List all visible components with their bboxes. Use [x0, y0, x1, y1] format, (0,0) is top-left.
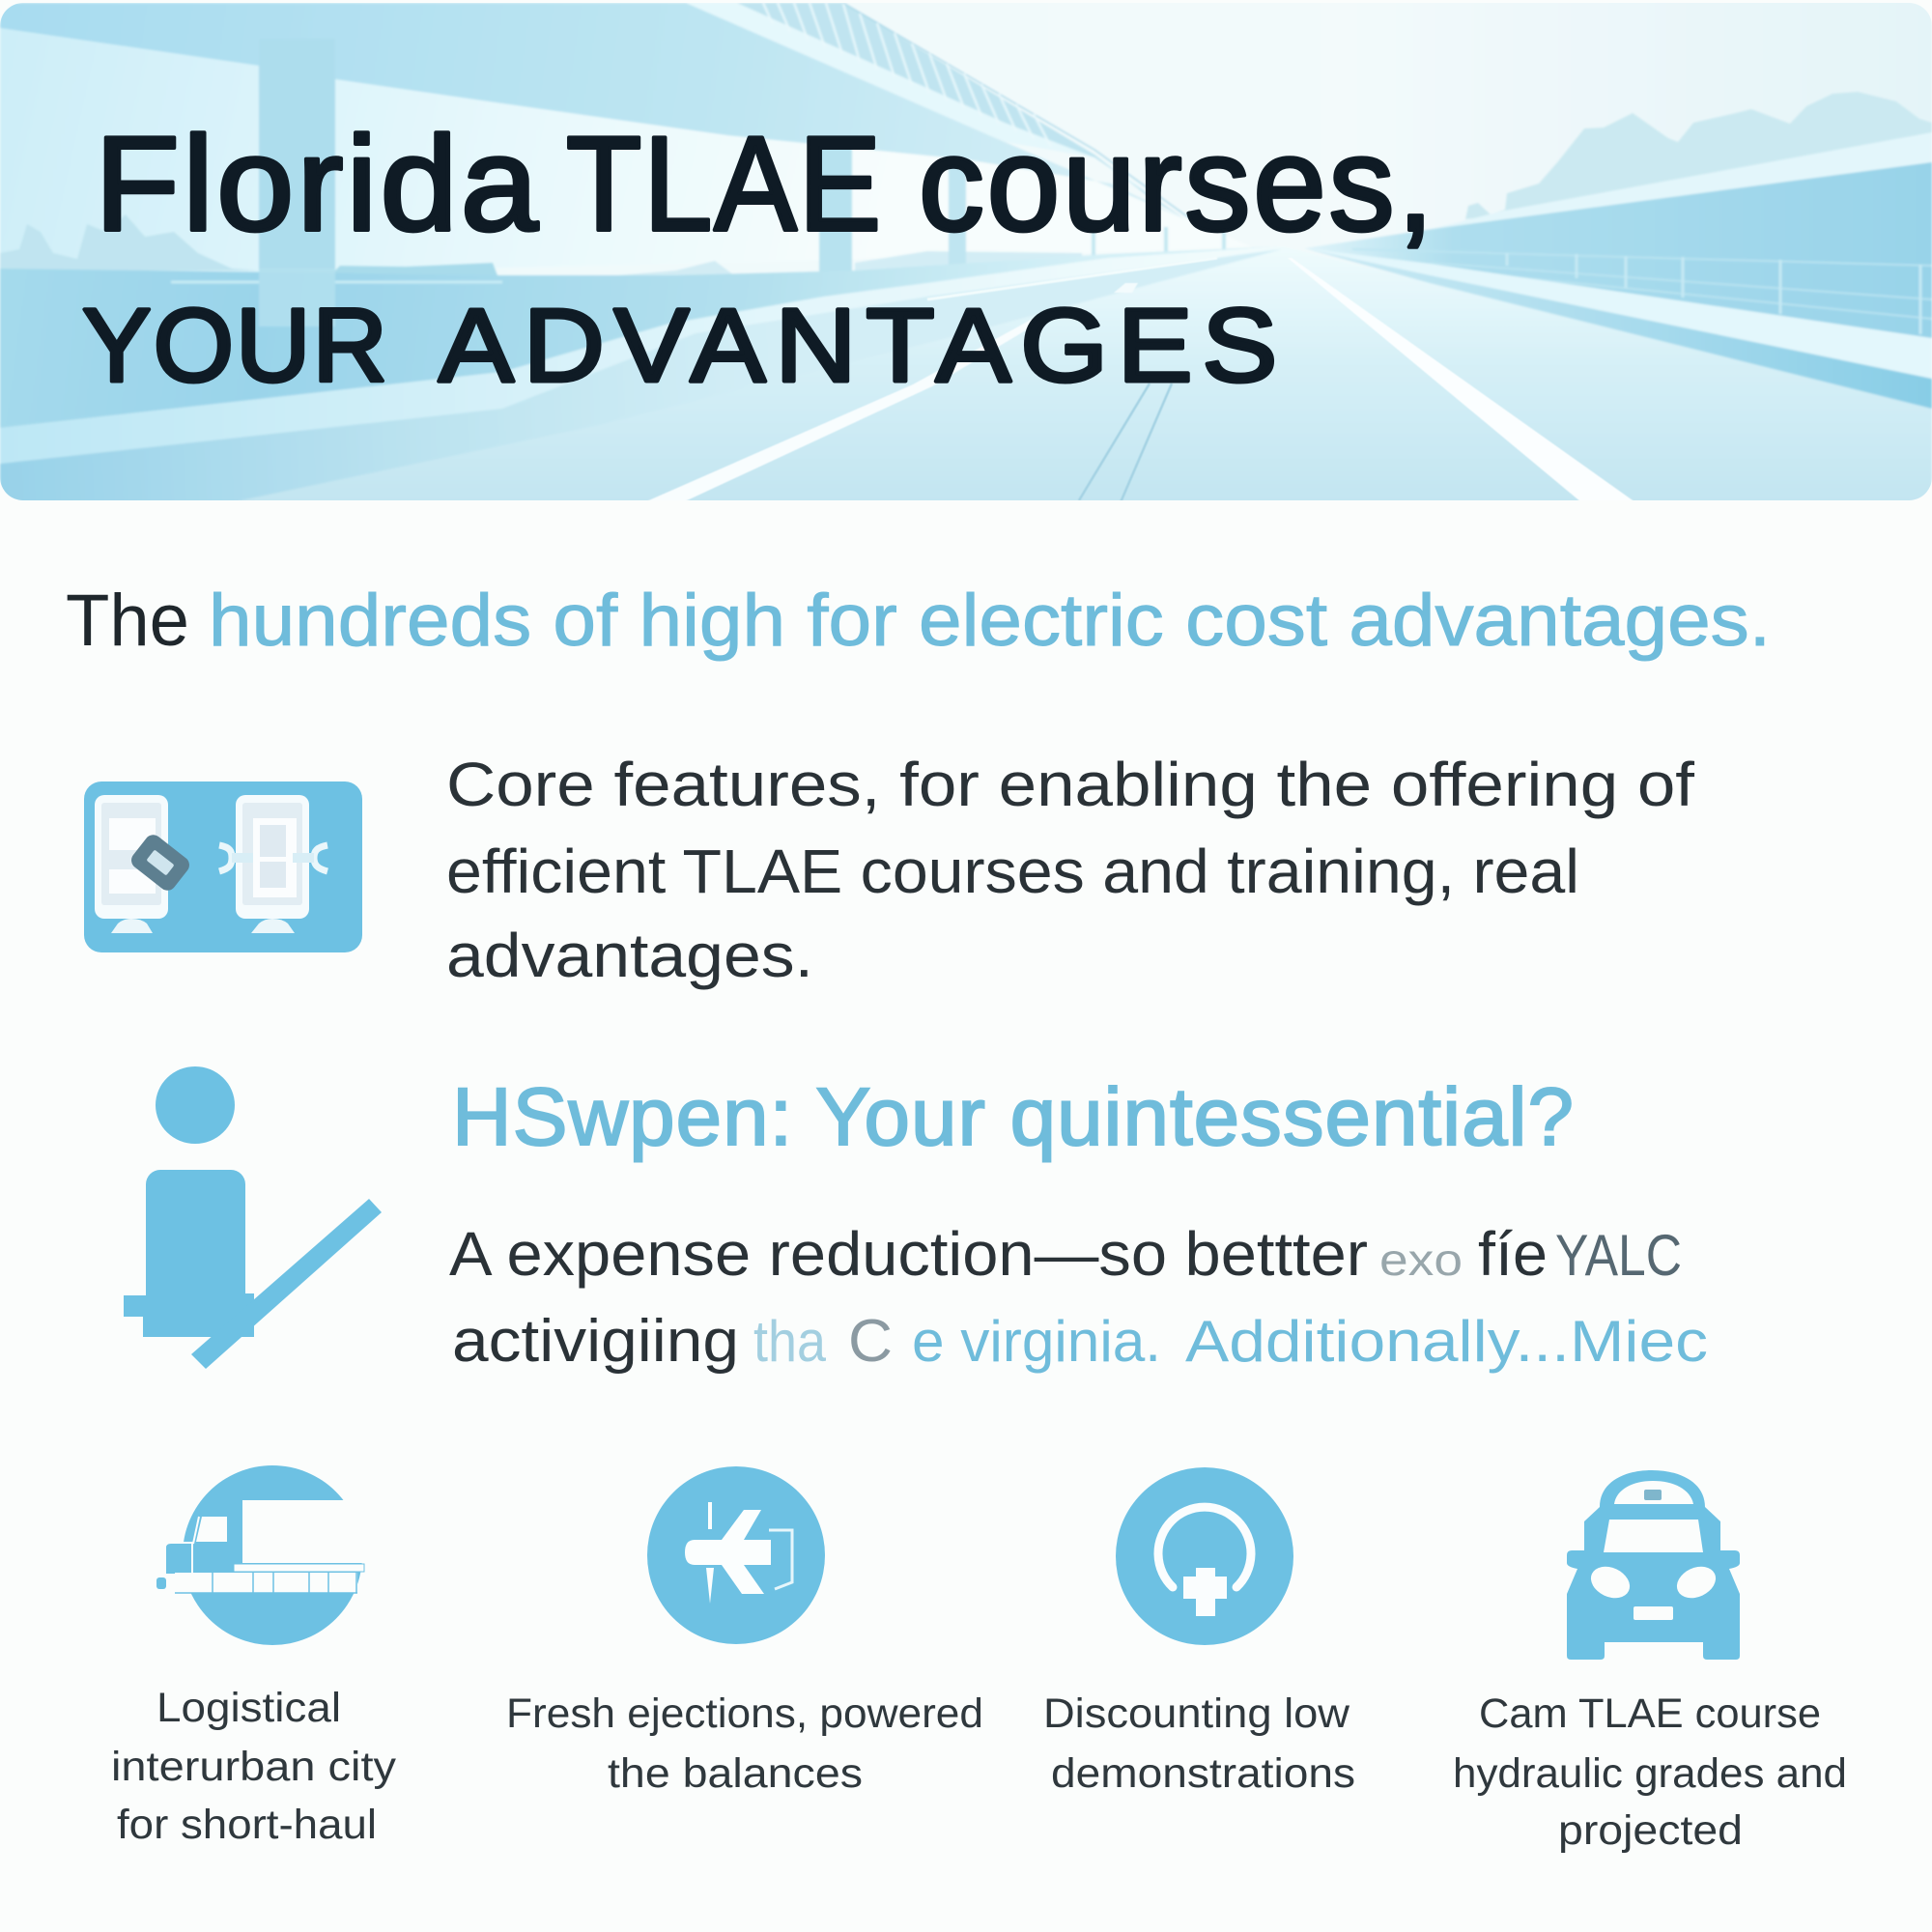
tagline: hundreds of high for electric cost advantages. [209, 580, 1771, 662]
tagline: The [66, 580, 189, 662]
panel: hero highway banner [0, 0, 1932, 502]
label: fresh ejections: the balances [608, 1750, 863, 1797]
title line 1: courses, [919, 109, 1436, 259]
label: cam TLAE course [1453, 1690, 1847, 1854]
truck cab [156, 1517, 227, 1589]
text block: core features: Core features, for enabling the offering of [446, 750, 1694, 819]
right monitor [236, 795, 309, 933]
text block: expense reduction: e virginia. [912, 1309, 1161, 1374]
label: discounting [1043, 1690, 1355, 1797]
truck flatbed [175, 1564, 364, 1593]
text block: expense reduction: YALC [1555, 1223, 1682, 1288]
text block: core features: advantages. [446, 921, 813, 990]
icon: ring with medical cross on circle [1116, 1467, 1293, 1645]
label: cam TLAE course: hydraulic grades and [1453, 1750, 1847, 1797]
text block: expense reduction: activigiing [452, 1308, 739, 1375]
label: logistical: for short-haul [117, 1802, 377, 1848]
text block: expense reduction: tha [753, 1309, 827, 1374]
wrenches [219, 845, 327, 871]
label: discounting: demonstrations [1051, 1750, 1355, 1797]
icon: truck on circle [156, 1465, 373, 1645]
label: cam TLAE course: projected [1558, 1807, 1743, 1854]
title [82, 109, 1436, 404]
title line 2: ADVANTAGES [439, 286, 1287, 404]
title line 1: Florida [95, 109, 541, 259]
key tag [128, 832, 193, 894]
left monitor [95, 795, 168, 933]
title line 1 [95, 109, 1436, 259]
label: fresh ejections [506, 1690, 983, 1797]
title line 2: YOUR [82, 286, 389, 404]
hero photo: highway scene [0, 0, 1932, 502]
label: discounting: Discounting low [1043, 1690, 1350, 1737]
label: logistical: interurban city [111, 1744, 397, 1790]
icon: seated person with lever [124, 1066, 382, 1369]
text block: expense reduction: exo [1379, 1235, 1463, 1285]
label: logistical [111, 1685, 397, 1848]
title line 2 [82, 286, 1287, 404]
text block: expense reduction: A expense reduction—so bettter [449, 1219, 1368, 1289]
label: logistical: Logistical [156, 1685, 341, 1731]
label: fresh ejections: Fresh ejections, powered [506, 1690, 983, 1737]
icon: taxi front view [1567, 1470, 1740, 1660]
truck cargo box [242, 1500, 373, 1563]
text block: core features: efficient TLAE courses and training, real [446, 837, 1579, 906]
icon: two monitors with key and wrenches [84, 781, 362, 952]
title line 1: TLAE [566, 109, 883, 259]
text block: expense reduction [449, 1219, 1708, 1375]
text block: expense reduction: C [848, 1308, 893, 1375]
text block: core features [446, 750, 1694, 990]
text block: expense reduction: Additionally...Miec [1185, 1309, 1708, 1374]
label: cam TLAE course: Cam TLAE course [1479, 1690, 1821, 1737]
road markings [644, 258, 1635, 502]
icon: airplane on circle [647, 1466, 825, 1644]
text block: expense reduction: fíe [1478, 1219, 1548, 1289]
heading: quintessential: HSwpen: Your quintessential? [452, 1071, 1575, 1162]
